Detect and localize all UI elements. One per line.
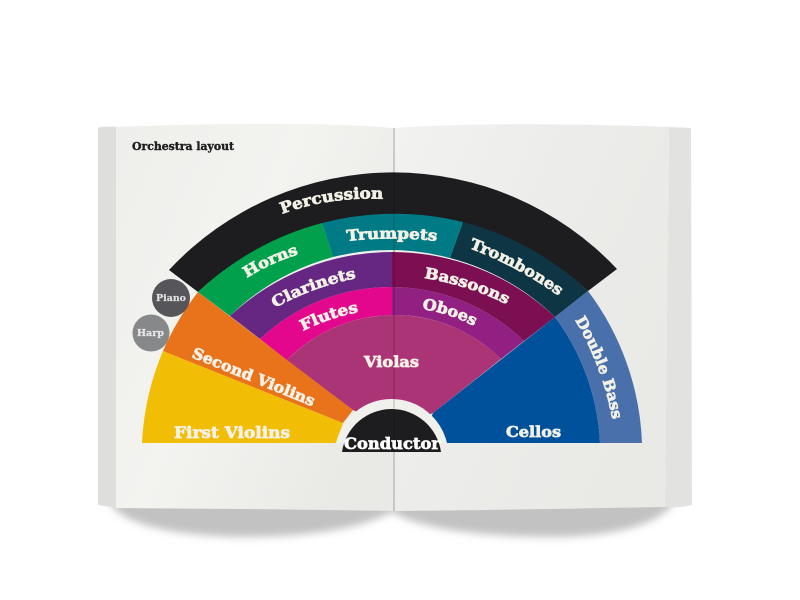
section: percussion [169,172,617,292]
label: first violins: First Violins [174,423,290,442]
spine line [393,128,395,511]
right page edge [665,127,692,507]
open book [98,124,692,511]
label: trombones: Trombones [471,237,562,295]
title: Orchestra layout [132,140,235,153]
section: flutes [260,287,392,360]
spine overlay [393,173,395,452]
label: percussion: Percussion [278,186,384,214]
section: violas [287,315,501,430]
label: oboes: Oboes [423,298,477,326]
label: clarinets: Clarinets [272,270,356,306]
book shadow [108,500,676,537]
conductor ring [336,399,447,443]
left page edge [98,127,118,508]
left page [116,124,393,511]
section: cellos [420,317,600,443]
icon: harp [132,314,170,352]
label: bassoons: Bassoons [424,266,510,304]
section: trumpets [322,214,463,258]
label: trumpets: Trumpets [346,228,437,242]
section: bassoons [392,252,555,341]
section: double bass [555,291,642,443]
label: second violins: Second Violins [192,348,315,406]
icon: piano [152,279,190,317]
orchestra diagram [142,172,642,453]
icon: harp: Harp [137,329,164,339]
label: conductor: Conductor [344,434,441,453]
section: clarinets [230,252,392,339]
label: flutes: Flutes [298,304,358,332]
section: first violins [142,351,343,443]
section: second violins [163,292,353,423]
section: horns [198,223,333,316]
section: trombones [450,222,588,317]
conductor podium [342,409,441,452]
label: double bass: Double Bass [574,314,620,419]
icon: piano: Piano [156,294,186,304]
section: oboes [392,287,524,359]
label: violas: Violas [363,353,419,371]
label: horns: Horns [241,247,298,278]
right page [393,124,669,511]
label: cellos: Cellos [506,423,561,441]
